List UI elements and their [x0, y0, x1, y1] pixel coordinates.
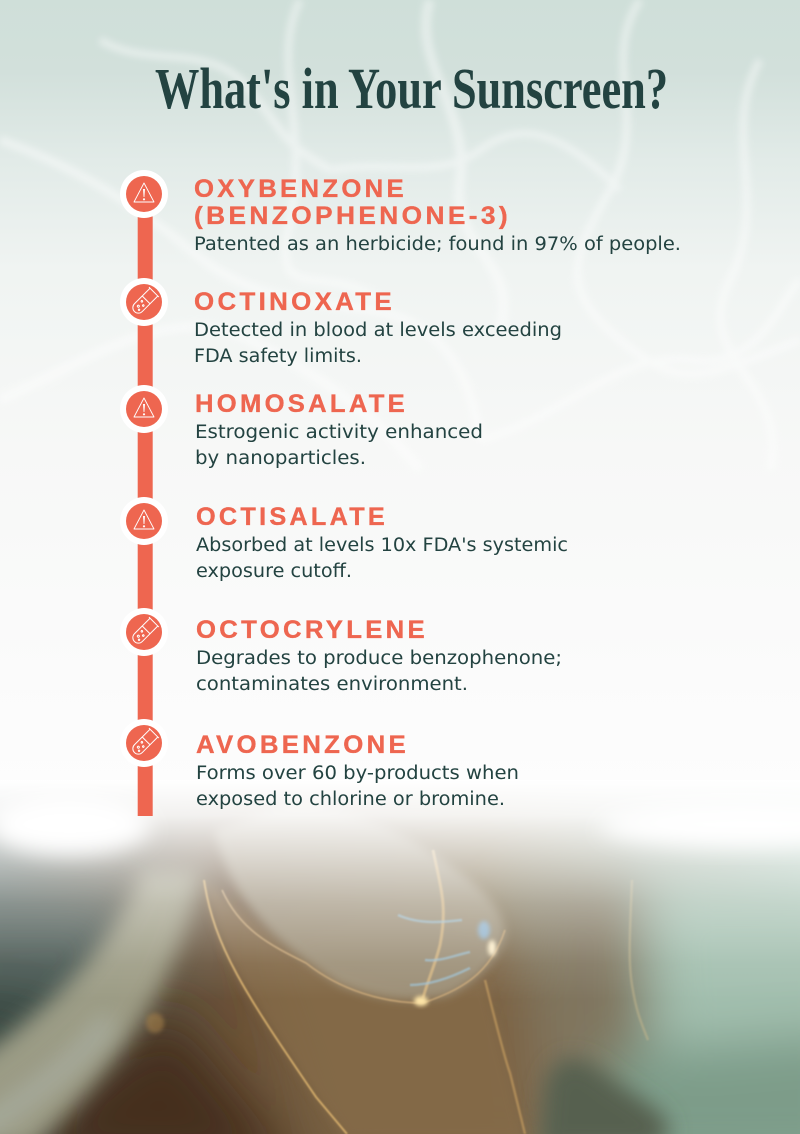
- entry: oxybenzone: (BENZOPHENONE-3): [194, 202, 511, 230]
- timeline marker: test tube icon 2: [120, 608, 168, 656]
- entry: homosalate: by nanoparticles.: [195, 448, 366, 469]
- timeline marker: warning icon 1: [120, 170, 168, 218]
- entry: octisalate: Absorbed at levels 10x FDA's systemic: [196, 535, 568, 556]
- entry: octinoxate: [194, 288, 562, 367]
- entry: avobenzone: [196, 731, 519, 810]
- entry: octocrylene: contaminates environment.: [196, 674, 468, 695]
- entry: homosalate: Estrogenic activity enhanced: [195, 422, 483, 443]
- entry: octinoxate: OCTINOXATE: [194, 288, 395, 316]
- entry: oxybenzone: OXYBENZONE: [194, 175, 407, 203]
- entry: octinoxate: Detected in blood at levels exceeding: [194, 320, 562, 341]
- entry: oxybenzone: [194, 175, 681, 255]
- entry: homosalate: HOMOSALATE: [195, 390, 408, 418]
- entry: avobenzone: AVOBENZONE: [196, 731, 409, 759]
- timeline marker: warning icon 3: [120, 497, 168, 545]
- entry: octisalate: OCTISALATE: [196, 503, 388, 531]
- timeline: [120, 170, 168, 816]
- entry: octocrylene: Degrades to produce benzophenone;: [196, 648, 562, 669]
- entry: octinoxate: FDA safety limits.: [194, 346, 362, 367]
- background: blurred skin and sunscreen photo: [0, 780, 800, 1134]
- entry: oxybenzone: Patented as an herbicide; found in 97% of people.: [194, 234, 681, 255]
- timeline marker: warning icon 2: [120, 385, 168, 433]
- entry: avobenzone: exposed to chlorine or bromine.: [196, 789, 505, 810]
- entry: octocrylene: [196, 616, 562, 695]
- entry: octisalate: exposure cutoff.: [196, 561, 352, 582]
- entry: octisalate: [196, 503, 568, 582]
- timeline marker: test tube icon 3: [120, 719, 168, 767]
- entry: octocrylene: OCTOCRYLENE: [196, 616, 428, 644]
- entry: avobenzone: Forms over 60 by-products when: [196, 763, 519, 784]
- timeline marker: test tube icon 1: [120, 278, 168, 326]
- entry: homosalate: [195, 390, 483, 469]
